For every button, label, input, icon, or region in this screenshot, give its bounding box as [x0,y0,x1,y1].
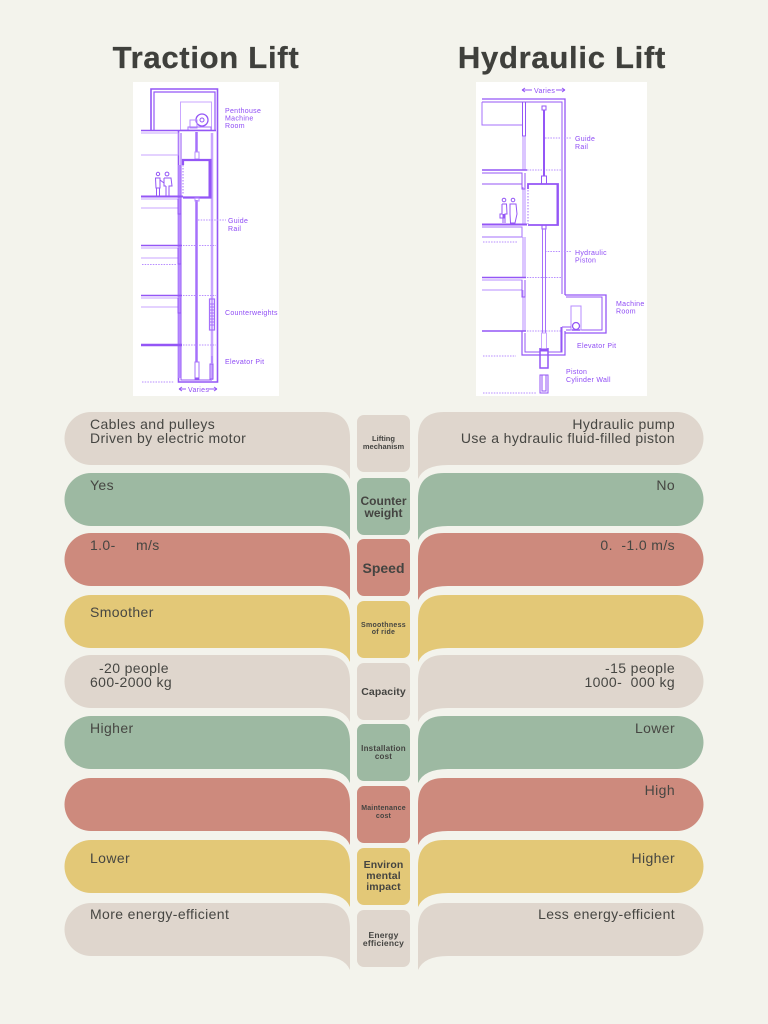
shaft walls and rails [180,132,213,380]
row: capacity, traction: 600-2000 kg [90,674,172,690]
diagram: hydraulic lift [476,82,647,396]
shaft walls and roof [482,99,565,355]
row: installation cost, label: cost [375,752,392,760]
row: counterweight, traction: Yes [90,477,114,493]
row: capacity, hydraulic [418,655,704,722]
row: maintenance cost, traction [64,778,350,845]
elevator car [183,160,210,201]
varies arrow: Varies [188,387,209,394]
labels: Machine [225,116,254,122]
row: energy efficiency, traction: More energy-efficient [90,906,229,922]
row: speed, traction: 1.0- [90,537,116,553]
row: speed, hydraulic [418,533,704,600]
hydraulic piston and guide rail [542,106,546,349]
counterweights [210,299,214,330]
row: lifting mechanism, hydraulic: Hydraulic pump [572,416,675,432]
labels: Hydraulic [575,250,607,257]
labels: Elevator Pit [225,359,264,366]
diagram: traction lift [133,82,279,396]
row: energy efficiency, label: Energy [368,930,399,940]
labels: Elevator Pit [577,343,616,350]
people [500,198,517,223]
row: lifting mechanism, traction [64,412,350,479]
row: smoothness, label: Smoothness [361,622,406,629]
labels: Rail [575,144,588,151]
row: maintenance cost, label: Maintenance [361,804,406,812]
row: smoothness, hydraulic [418,595,704,662]
row: counterweight, label [357,478,410,535]
row: capacity, label [357,663,410,720]
row: capacity, traction: -20 people [99,660,169,676]
row: lifting mechanism, hydraulic [418,412,704,478]
row: environmental impact, label [357,848,410,905]
row: energy efficiency, hydraulic [418,903,704,970]
row: smoothness, traction [64,595,350,662]
row: installation cost, traction [64,716,350,783]
row: lifting mechanism, label: mechanism [363,442,404,450]
labels: Room [616,308,636,316]
row: energy efficiency, label [357,910,410,967]
row: environmental impact, hydraulic: Higher [631,850,675,866]
people [156,172,172,196]
elevator car [528,184,558,225]
piston cylinder [540,348,548,393]
row: counterweight, label: Counter [360,494,406,508]
row: installation cost, traction: Higher [90,720,134,736]
row: environmental impact, traction [64,840,350,907]
row: environmental impact, label: mental [366,870,401,882]
row: environmental impact, traction: Lower [90,850,130,866]
labels: Cylinder Wall [566,377,611,384]
row: counterweight, hydraulic [418,473,704,540]
row: speed, label: Speed [362,560,404,576]
row: maintenance cost, label: cost [376,812,391,820]
row: capacity, traction [64,655,350,722]
labels: Penthouse [225,108,261,115]
labels: Machine [616,301,645,308]
row: lifting mechanism, hydraulic: Use a hydraulic fluid-filled piston [461,430,675,446]
row: speed, traction [64,533,350,600]
varies arrow [522,88,565,95]
row: counterweight, hydraulic: No [656,477,675,493]
penthouse machine room structure [141,89,218,382]
floors and slabs [482,138,571,393]
labels [566,136,645,384]
row: energy efficiency, hydraulic: Less energy-efficient [538,906,675,922]
labels: Rail [228,226,241,233]
row: counterweight, traction [64,473,350,540]
row: speed, hydraulic: 0. -1.0 m/s [600,537,675,553]
title: Traction Lift: Traction Lift [113,40,299,75]
row: installation cost, hydraulic [418,716,704,783]
labels: Counterweights [225,310,278,317]
row: environmental impact, label: Environ [364,859,403,871]
varies arrow [179,387,217,394]
row: energy efficiency, label: efficiency [363,938,404,948]
row: lifting mechanism, label: Lifting [372,434,395,442]
row: installation cost, hydraulic: Lower [635,720,675,736]
labels: Guide [228,218,248,225]
row: speed, traction: m/s [136,537,160,553]
row: capacity, hydraulic: -15 people [605,660,675,676]
row: maintenance cost, hydraulic: High [645,782,675,798]
row: speed, label [357,539,410,596]
row: smoothness, label [357,601,410,658]
row: smoothness, traction: Smoother [90,604,154,620]
machine room [561,295,606,352]
row: environmental impact, hydraulic [418,840,704,907]
labels: Room [225,123,245,130]
row: lifting mechanism, traction: Driven by electric motor [90,430,246,446]
row: lifting mechanism, label [357,415,410,472]
labels: Piston [575,258,596,264]
row: installation cost, label: Installation [361,744,406,752]
row: smoothness, label: of ride [372,629,395,636]
floors and slabs [141,196,226,382]
labels [225,108,278,366]
row: environmental impact, label: impact [366,881,401,893]
row: maintenance cost, label [357,786,410,843]
row: installation cost, label [357,724,410,781]
title: Hydraulic Lift: Hydraulic Lift [458,40,666,75]
labels: Piston [566,369,587,376]
row: lifting mechanism, traction: Cables and pulleys [90,416,215,432]
row: counterweight, label: weight [364,506,402,520]
row: maintenance cost, hydraulic [418,778,704,845]
row: capacity, label: Capacity [361,686,406,698]
varies arrow: Varies [534,88,555,95]
labels: Guide [575,136,595,143]
row: capacity, hydraulic: 1000- 000 kg [584,674,675,690]
row: energy efficiency, traction [64,903,350,970]
